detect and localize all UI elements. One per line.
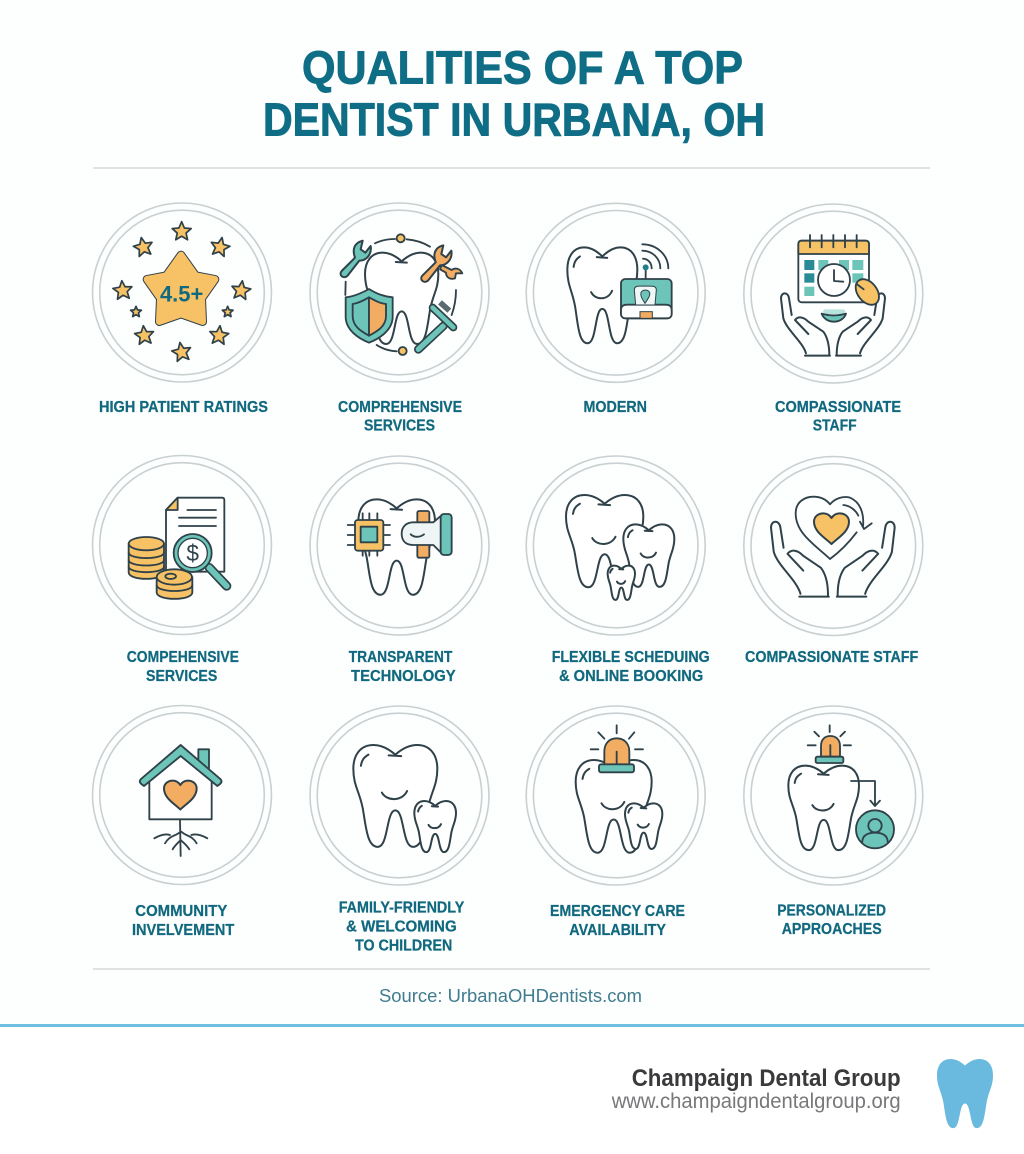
label: STAFF [813, 418, 857, 434]
label: & ONLINE BOOKING [559, 668, 703, 685]
label: AVAILABILITY [569, 922, 666, 939]
icon: tooth with siren and person [788, 725, 894, 850]
label: COMMUNITY [135, 903, 228, 920]
footer brand name: Champaign Dental Group [632, 1065, 901, 1092]
label: SERVICES [146, 668, 218, 685]
label [338, 399, 462, 434]
icon: calendar held in hands [781, 235, 885, 356]
panel: flexible scheduling and online booking [526, 456, 710, 685]
panel: compehensive services (coins) [92, 456, 272, 685]
footer band [0, 1024, 1024, 1154]
label: FLEXIBLE SCHEDUING [552, 649, 710, 666]
label: COMPREHENSIVE [338, 399, 462, 416]
label: EMERGENCY CARE [550, 903, 685, 920]
panel: personalized approaches [744, 706, 923, 938]
icon: rating stars [112, 222, 252, 362]
label: COMPEHENSIVE [127, 649, 239, 666]
source note: Source: UrbanaOHDentists.com [379, 985, 642, 1006]
panel: emergency care availability [526, 706, 705, 939]
label: TRANSPARENT [349, 649, 452, 666]
label [777, 902, 886, 938]
dollar sign: $ [186, 540, 199, 566]
panel: transparent technology [310, 456, 489, 685]
panel: compassionate staff (heart) [744, 456, 923, 666]
panel: family-friendly [310, 706, 489, 955]
label: FAMILY-FRIENDLY [339, 900, 465, 917]
label: TO CHILDREN [355, 938, 452, 955]
panel: modern [526, 203, 705, 416]
label: & WELCOMING [346, 919, 457, 936]
title: QUALITIES OF A TOP [302, 42, 743, 94]
footer url: www.champaigndentalgroup.org [611, 1090, 901, 1113]
label: APPROACHES [782, 921, 882, 938]
title [263, 42, 765, 146]
panel: compassionate staff (calendar) [744, 204, 923, 434]
rating value: 4.5+ [160, 282, 203, 307]
label [552, 649, 710, 685]
label: TECHNOLOGY [351, 668, 456, 685]
label: PERSONALIZED [777, 902, 886, 920]
title: DENTIST IN URBANA, OH [263, 94, 765, 146]
panel: comprehensive services [310, 203, 489, 434]
panel: community involvement [92, 706, 272, 939]
icon: large and small tooth [353, 745, 456, 852]
label: HIGH PATIENT RATINGS [99, 399, 268, 416]
label: INVELVEMENT [132, 922, 234, 939]
label: COMPASSIONATE [775, 399, 901, 416]
icon: three teeth [566, 495, 674, 600]
icon: tooth with chip and scanner [348, 499, 452, 595]
label: SERVICES [364, 418, 435, 434]
label [339, 900, 465, 955]
icon: house with heart and roots [140, 745, 222, 856]
label [132, 903, 234, 939]
icon: heart held in hands [771, 497, 895, 597]
label [127, 649, 239, 685]
icon: teeth with emergency siren [576, 725, 662, 853]
icon: logo tooth [937, 1059, 993, 1128]
label [349, 649, 456, 685]
label [775, 399, 901, 434]
icon: document coins and magnifier [129, 498, 227, 599]
label [550, 903, 685, 939]
panel: high patient ratings [92, 203, 272, 416]
icon: tooth with monitor and signal [567, 244, 672, 343]
label: COMPASSIONATE STAFF [745, 649, 918, 666]
label: MODERN [584, 399, 647, 416]
icon: tooth with tools and shield [341, 234, 462, 355]
